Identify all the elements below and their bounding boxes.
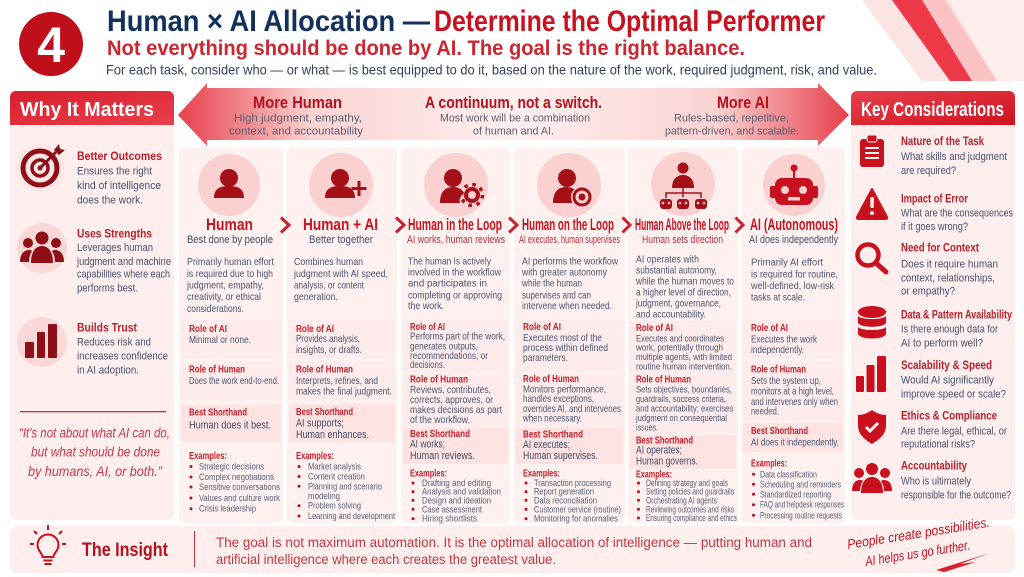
role of human: and accountability; exercises (636, 404, 733, 415)
role of AI: Executes most of the (523, 333, 602, 344)
ethics and compliance: Ethics & Compliance (901, 410, 997, 422)
role of AI (410, 322, 505, 371)
description (635, 254, 734, 320)
role of AI: routine human intervention. (636, 361, 732, 372)
role of human (410, 374, 502, 426)
heading: the insight: The Insight (82, 540, 169, 561)
role of AI: Role of AI (751, 323, 788, 334)
best shorthand (523, 430, 598, 462)
heading: Better together (309, 234, 373, 246)
description: while the human (521, 279, 582, 290)
examples: Monitoring for anomalies (534, 513, 618, 524)
best shorthand: Best Shorthand (296, 407, 353, 418)
description (521, 256, 618, 312)
role of human: guardrails, success criteria, (636, 394, 726, 405)
examples: Examples: (636, 469, 672, 480)
column: AI (Autonomous) (741, 147, 845, 523)
heading: Human (206, 216, 253, 234)
role of human: handles exceptions, (523, 394, 594, 405)
scalability and speed (901, 360, 1006, 401)
role of human: judgment on consequential (635, 413, 727, 424)
better outcomes text: Ensures the right (77, 165, 153, 177)
description (186, 257, 274, 315)
role of AI (296, 324, 362, 356)
data and pattern availability: Is there enough data for (901, 324, 998, 336)
need for context: Does it require human (901, 258, 998, 270)
examples: Hiring shortlists (422, 513, 477, 524)
description: tasks at scale. (751, 293, 805, 304)
builds trust text: Reduces risk and (77, 337, 151, 349)
column: Human on the Loop (514, 147, 625, 524)
role of human: Sets objectives, boundaries, (636, 385, 732, 396)
builds trust text: in AI adoption. (77, 364, 139, 376)
examples: Transaction processing (534, 477, 611, 488)
best shorthand: Best Shorthand (189, 408, 247, 418)
role of human: and intervenes only when (751, 397, 838, 408)
role of human: Sets the system up, (751, 376, 821, 387)
examples: Defining strategy and goals (646, 477, 728, 488)
examples: Planning and scenario (308, 480, 382, 491)
best shorthand: Best Shorthand (410, 429, 470, 440)
insight message: artificial intelligence where each creates the greatest value. (216, 552, 556, 567)
heading: AI works, human reviews (407, 234, 505, 246)
role of human (296, 365, 392, 398)
best shorthand: Human enhances. (296, 429, 369, 441)
description: generation. (294, 292, 338, 303)
examples: Drafting and editing (422, 477, 491, 488)
ethics and compliance (901, 410, 1007, 451)
description: considerations. (187, 304, 244, 315)
role of human: issues. (636, 423, 658, 434)
heading: Human sets direction (642, 234, 723, 246)
better outcomes text: Better Outcomes (77, 151, 162, 163)
role of AI: independently. (751, 345, 804, 356)
description: completing or approving (408, 290, 502, 301)
title: Determine the Optimal Performer (434, 5, 825, 38)
role of human: makes the final judgment. (296, 386, 392, 398)
role of AI: insights, or drafts. (296, 345, 362, 356)
more AI label: Rules-based, repetitive, (674, 113, 789, 125)
icon: people (17, 223, 67, 273)
better outcomes text: does the work. (77, 194, 143, 206)
nature of the task: are required? (901, 165, 956, 177)
nature of the task: What skills and judgment (901, 151, 1008, 163)
description: is required for routine, (751, 269, 838, 280)
role of AI (523, 322, 608, 364)
role of human: when necessary. (522, 414, 582, 425)
need for context (901, 243, 998, 297)
role of human: Interprets, refines, and (296, 376, 378, 387)
more AI label: More AI (717, 94, 769, 112)
best shorthand (751, 426, 839, 448)
role of AI (635, 323, 732, 372)
description: AI operates with (636, 254, 699, 265)
heading: Human in the Loop (408, 216, 502, 234)
best shorthand: Best Shorthand (751, 426, 808, 437)
description: analysis, or content (294, 280, 364, 292)
heading: Human on the Loop (522, 216, 614, 234)
heading: Human Above the Loop (635, 216, 729, 234)
role of human: Role of Human (523, 374, 579, 385)
icon: people (852, 463, 892, 493)
description: AI performs the workflow (522, 256, 618, 267)
examples: Processing routine requests (760, 509, 842, 520)
icon: magnifier (858, 244, 886, 272)
continuum label (425, 94, 602, 138)
panel: key considerations (851, 91, 1015, 520)
examples: FAQ and helpdesk responses (760, 499, 844, 510)
nature of the task: Nature of the Task (901, 136, 984, 148)
uses strengths text: capabilities where each (77, 269, 170, 281)
examples: Examples: (410, 469, 447, 480)
heading: AI executes, human supervises (519, 234, 620, 246)
best shorthand: Human does it best. (189, 420, 271, 432)
role of AI: decisions. (410, 360, 445, 371)
builds trust text (77, 322, 168, 376)
heading: Human + AI (303, 216, 378, 234)
description: judgment, governance, (635, 299, 721, 310)
description (408, 256, 502, 312)
examples: Case assessment (422, 503, 482, 514)
icon: person with gear (424, 153, 488, 217)
heading: AI (Autonomous) (750, 216, 838, 234)
examples (636, 469, 737, 523)
need for context: Need for Context (901, 243, 979, 255)
accountability: Accountability (901, 460, 968, 472)
title (107, 5, 825, 38)
role of human (635, 375, 733, 434)
continuum label: of human and AI. (473, 126, 554, 138)
examples (410, 469, 501, 524)
examples: Market analysis (308, 460, 361, 472)
icon: warning (857, 189, 887, 219)
examples: Strategic decisions (199, 460, 264, 472)
more human label: High judgment, empathy, (234, 113, 362, 125)
icon: person over agents (651, 152, 715, 216)
description: Primarily human effort (187, 257, 274, 268)
heading: key considerations (851, 91, 1015, 125)
examples: Examples: (751, 459, 787, 470)
role of AI: Executes and coordinates (636, 334, 724, 345)
examples: Learning and development (308, 510, 395, 521)
column: Human + AI (287, 147, 397, 523)
need for context: context, relationships, (901, 273, 995, 285)
column: Human (179, 147, 283, 523)
description: and participates in (408, 279, 487, 290)
number badge: 4 (37, 17, 65, 73)
role of human: Monitors performance, (523, 385, 606, 396)
heading (187, 216, 273, 246)
panel: the insight (10, 515, 1015, 573)
uses strengths text: Uses Strengths (77, 228, 152, 240)
description: intervene when needed. (522, 301, 612, 312)
role of AI: generates outputs, (410, 341, 478, 352)
uses strengths text (76, 228, 171, 295)
description: judgment, empathy, (186, 280, 264, 292)
role of AI: Executes the work (751, 334, 818, 345)
subtitle: Not everything should be done by AI. The goal is the right balance. (107, 37, 745, 60)
role of AI (751, 323, 818, 356)
number badge (19, 12, 83, 76)
better outcomes text (77, 151, 162, 206)
impact of error (901, 194, 1013, 233)
examples: Examples: (189, 451, 227, 462)
heading (303, 216, 378, 246)
best shorthand: Human reviews. (410, 450, 475, 462)
role of human: Role of Human (751, 364, 806, 375)
more AI label (665, 94, 799, 138)
more human label: context, and accountability (229, 126, 364, 138)
description: judgment with AI speed, (293, 269, 388, 280)
scalability and speed: improve speed or scale? (901, 389, 1006, 401)
description: supervises and can (522, 290, 591, 301)
handwritten note: AI helps us go further. (863, 538, 971, 569)
icon: shield (858, 410, 886, 444)
best shorthand: Human supervises. (523, 450, 598, 462)
background diagonal bands (862, 0, 1024, 81)
description: The human is actively (408, 256, 492, 267)
examples (751, 459, 844, 520)
description: and accountability. (636, 309, 706, 320)
best shorthand: AI works; (410, 439, 445, 451)
role of human: needed. (751, 406, 779, 417)
accountability (901, 460, 1011, 501)
role of AI (189, 324, 251, 346)
best shorthand (410, 429, 475, 462)
role of AI: Role of AI (636, 323, 673, 334)
heading: why it matters: Why It Matters (20, 99, 154, 121)
examples (296, 451, 395, 521)
role of AI: Role of AI (296, 324, 334, 335)
examples: Orchestrating AI agents (646, 494, 717, 505)
description: substantial autonomy, (636, 266, 717, 277)
examples: Analysis and validation (422, 486, 501, 497)
best shorthand: Human governs. (636, 455, 698, 467)
best shorthand: Best Shorthand (523, 430, 583, 441)
icon: robot (763, 154, 825, 216)
examples: Data classification (760, 468, 817, 479)
data and pattern availability (901, 309, 1012, 350)
panel: why it matters (10, 91, 174, 520)
description (750, 258, 838, 304)
icon: person plus (309, 153, 373, 217)
insight message (216, 535, 812, 567)
uses strengths text: performs best. (77, 283, 138, 295)
description: the work. (408, 301, 444, 312)
ethics and compliance: reputational risks? (901, 439, 975, 451)
role of AI: work, potentially through (635, 343, 723, 354)
quote: by humans, AI, or both.” (28, 464, 162, 479)
heading (635, 216, 729, 246)
heading: AI does independently (749, 234, 838, 246)
role of human (751, 364, 838, 417)
best shorthand: AI does it independently. (751, 437, 839, 448)
column: Human in the Loop (401, 147, 510, 524)
role of human: overrides AI, and intervenes (523, 404, 621, 415)
examples: Content creation (308, 470, 365, 482)
examples (189, 451, 280, 514)
role of AI: process within defined (523, 343, 608, 354)
icon: person with target (537, 153, 601, 217)
role of AI: Role of AI (410, 322, 445, 333)
need for context: or empathy? (901, 285, 955, 297)
handwritten note (846, 515, 991, 572)
continuum label: Most work will be a combination (440, 113, 590, 125)
best shorthand (296, 407, 369, 441)
examples: Reviewing outcomes and risks (646, 503, 734, 514)
better outcomes text: kind of intelligence (77, 180, 161, 192)
role of human: Role of Human (189, 365, 245, 376)
examples: Examples: (523, 469, 560, 480)
role of human: Role of Human (636, 375, 691, 386)
icon: clipboard (860, 135, 884, 167)
icon: person (198, 154, 260, 216)
heading: why it matters (10, 91, 174, 125)
builds trust text: Builds Trust (77, 322, 137, 334)
description: creativity, or ethical (187, 292, 261, 303)
role of AI: Performs part of the work, (410, 331, 505, 342)
role of human: makes decisions as part (410, 405, 502, 416)
examples: modeling (308, 490, 340, 501)
insight message: The goal is not maximum automation. It is the optimal allocation of intelligence — putting human and (216, 535, 812, 550)
role of human: Role of Human (410, 374, 468, 385)
continuum label: A continuum, not a switch. (425, 94, 602, 112)
description: Primarily AI effort (751, 258, 823, 269)
best shorthand (636, 435, 698, 467)
examples (523, 469, 621, 524)
icon: bars (856, 356, 886, 392)
role of human (522, 374, 621, 425)
description (293, 257, 388, 303)
role of AI: recommendations, or (410, 351, 488, 362)
role of AI: Role of AI (523, 322, 561, 333)
description: a higher level of direction, (636, 288, 731, 299)
role of AI: multiple agents, with limited (636, 352, 732, 363)
examples: Problem solving (308, 500, 361, 511)
continuum arrow banner (178, 83, 849, 146)
best shorthand: AI operates; (636, 444, 682, 456)
accountability: Who is ultimately (901, 475, 971, 487)
quote: “It's not about what AI can do, (19, 426, 170, 441)
more human label (229, 94, 364, 138)
description: while the human moves to (635, 276, 734, 287)
chevron arrows between columns (281, 218, 743, 232)
best shorthand: AI executes; (523, 439, 570, 451)
role of AI: Role of AI (189, 324, 227, 335)
builds trust text: increases confidence (77, 350, 168, 362)
icon: bar chart (17, 317, 67, 367)
more human label: More Human (253, 94, 342, 112)
role of human: monitors at a high level, (751, 386, 834, 397)
description: is required due to high (187, 269, 273, 280)
handwritten note: People create possibilities. (846, 515, 991, 552)
nature of the task (901, 136, 1008, 177)
heading (749, 216, 838, 246)
heading (407, 216, 505, 246)
role of AI: Provides analysis, (296, 334, 360, 345)
examples: Data reconciliation (534, 494, 597, 505)
examples: Design and ideation (422, 494, 491, 505)
quote (19, 426, 170, 479)
examples: Examples: (296, 451, 334, 462)
description: well-defined, low-risk (750, 281, 835, 292)
best shorthand: AI supports; (296, 418, 344, 430)
examples: Customer service (routine) (534, 503, 621, 514)
column: Human Above the Loop (628, 147, 738, 523)
examples: Ensuring compliance and ethics (646, 512, 737, 523)
heading (519, 216, 620, 246)
examples: Setting policies and guardrails (646, 486, 734, 497)
title: Human × AI Allocation — (107, 5, 430, 38)
role of human: of the workflow. (410, 415, 470, 426)
description: Combines human (294, 257, 363, 268)
scalability and speed: Scalability & Speed (901, 360, 992, 372)
role of human: corrects, approves, or (410, 395, 493, 406)
role of human: Reviews, contributes, (410, 385, 491, 396)
uses strengths text: judgment and machine (76, 256, 171, 268)
icon: database (858, 306, 886, 338)
intro sentence: For each task, consider who — or what — is best equipped to do it, based on the nature of the work, required judgment, risk, and value. (106, 62, 877, 78)
scalability and speed: Would AI significantly (901, 374, 994, 386)
impact of error: Impact of Error (901, 194, 968, 206)
uses strengths text: Leverages human (77, 242, 153, 254)
role of AI: Minimal or none. (189, 335, 251, 346)
heading: Best done by people (187, 234, 273, 246)
examples: Sensitive conversations (199, 481, 280, 492)
best shorthand: Best Shorthand (636, 435, 693, 446)
examples: Scheduling and reminders (760, 478, 841, 489)
examples: Values and culture work (199, 492, 280, 503)
data and pattern availability: AI to perform well? (901, 338, 983, 350)
examples: Standardized reporting (760, 488, 831, 499)
role of AI: parameters. (523, 353, 568, 364)
icon: target (16, 144, 65, 192)
impact of error: if it goes wrong? (901, 221, 968, 233)
examples: Crisis leadership (199, 503, 256, 514)
description: involved in the workflow (408, 268, 501, 279)
examples: Complex negotiations (199, 471, 274, 482)
icon: lightbulb (30, 525, 66, 564)
description: with greater autonomy (521, 268, 608, 279)
quote: but what should be done (31, 445, 160, 460)
role of human: Role of Human (296, 365, 353, 376)
role of human (189, 365, 279, 387)
more AI label: pattern-driven, and scalable. (665, 126, 799, 138)
best shorthand (189, 408, 271, 432)
role of human: Does the work end-to-end. (189, 376, 279, 387)
examples: Report generation (534, 486, 594, 497)
